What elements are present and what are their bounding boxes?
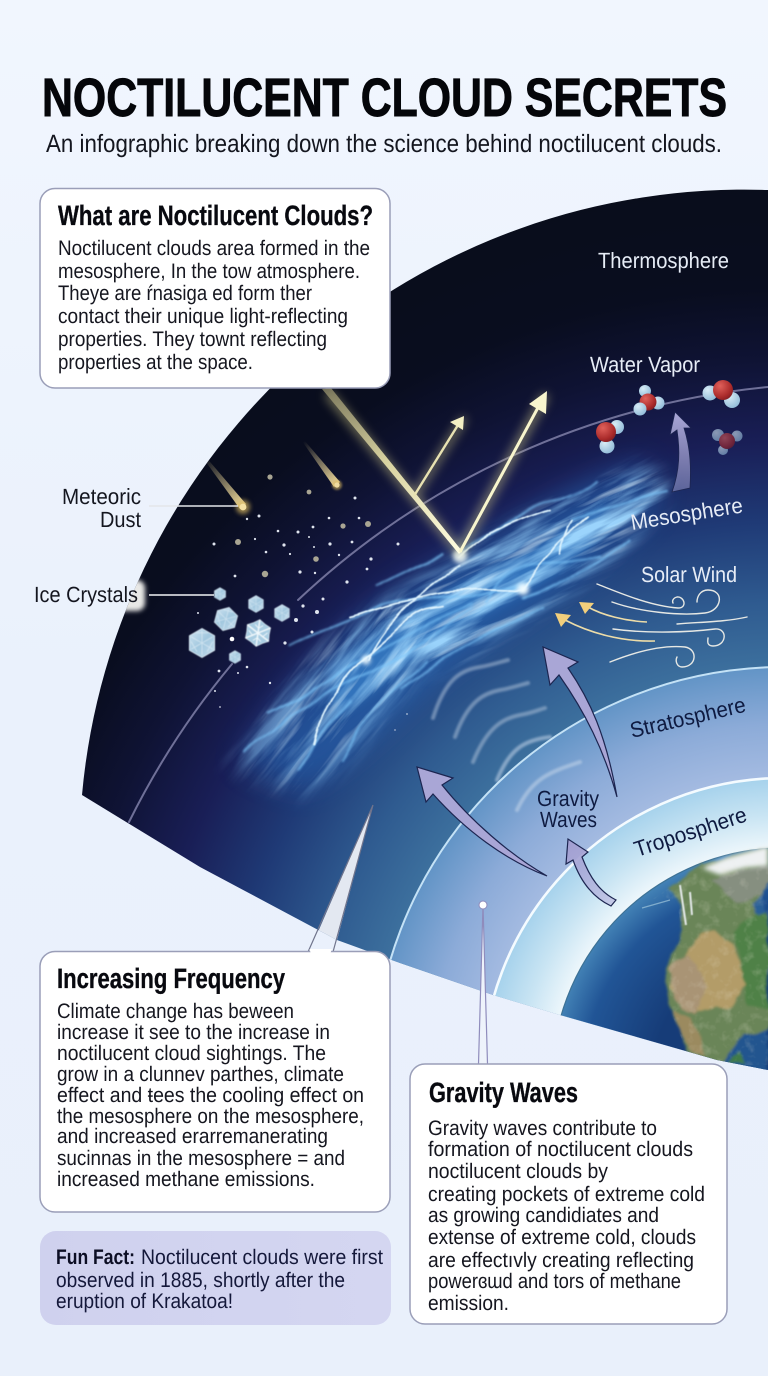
label: gravity waves: Waves [540,807,597,832]
label: gravity waves [537,786,599,832]
dust and ice speck field [197,474,408,731]
mesosphere boundary arc [129,387,768,822]
arrow: solar wind lower [555,613,655,641]
arrows: gravity waves rising [417,647,617,906]
coastal mountain snow [680,885,692,925]
body text: what are noctilucent clouds: Noctilucent clouds area formed in the [58,237,370,260]
heading: what are noctilucent clouds: What are Noctilucent Clouds? [58,200,373,231]
arrow: tall gravity wave [543,647,617,797]
water molecule one [596,420,624,454]
body text: what are noctilucent clouds: properties. They townt reflecting [58,328,327,351]
arrow: water vapor rising [670,412,691,492]
solar wind streams [555,584,747,667]
body text: gravity waves: noctilucent clouds by [428,1160,608,1183]
body text: gravity waves: extense of extreme cold, clouds [428,1226,696,1249]
atmosphere cross-section diagram [82,190,768,1070]
label: troposphere: Troposphere [631,802,750,862]
fun fact text [56,1246,383,1313]
body text: increasing frequency: effect and ŧees the cooling effect on [57,1084,364,1107]
callout pointer edges [308,805,373,952]
halo behind ice crystals label [124,577,149,615]
label: mesosphere: Mesosphere [629,493,744,535]
label: meteoric dust: Dust [100,507,141,532]
body text: what are noctilucent clouds [58,237,370,374]
fun fact text: Noctilucent clouds were first [141,1246,383,1269]
cloud callout pointer, shaded part [318,812,370,940]
body text: what are noctilucent clouds: contact their unique light-reflecting [58,305,348,328]
arrow: short gravity wave [566,839,616,906]
gravity wave ripples [433,660,545,762]
body text: what are noctilucent clouds: mesosphere, In the tow atmosphere. [58,260,360,283]
land masses [667,846,768,1078]
body text: gravity waves: emission. [428,1292,509,1315]
label: water vapor: Water Vapor [590,352,700,377]
body text: gravity waves: as growing candidiates and [428,1204,659,1227]
label: meteoric dust [62,484,141,532]
label: thermosphere: Thermosphere [598,248,729,273]
stratosphere wave ripples [497,737,580,810]
land texture [650,860,768,1065]
body text: increasing frequency: Climate change has beween [57,1000,294,1023]
water molecule two [634,385,664,416]
body text: increasing frequency: grow in a clunnev parthes, climate [57,1063,344,1086]
water molecule four [712,429,742,455]
panel: gravity waves [410,901,727,1324]
body text: gravity waves: formation of noctilucent clouds [428,1138,693,1161]
body text: increasing frequency: the mesosphere on the mesosphere, [57,1105,364,1128]
body text: gravity waves: powerɞɯd and tors of methane [428,1270,681,1293]
body text: gravity waves: Gravity waves contribute to [428,1117,657,1140]
fun fact text: Fun Fact: [56,1246,135,1269]
body text: increasing frequency [57,1000,364,1191]
body text: what are noctilucent clouds: properties at the space. [58,351,253,374]
icon: meteor one [203,456,250,514]
layer: troposphere [482,778,768,1080]
icon: water molecules [596,380,742,455]
heading: increasing frequency: Increasing Frequency [57,963,285,994]
fun fact text: observed in 1885, shortly after the [56,1269,345,1292]
cloud streak texture, lower left [224,593,434,800]
body text: increasing frequency: increased methane emissions. [57,1168,315,1191]
arrow: left gravity wave [417,767,547,876]
label: gravity waves: Gravity [537,786,599,811]
leader line: meteoric dust [149,505,238,507]
cloud fine streaks, lower left [246,594,438,792]
body text: increasing frequency: and increased erarremanerating [57,1125,328,1148]
body text: increasing frequency: sucinnas in the mesosphere = and [57,1147,345,1170]
panel: increasing frequency [40,805,390,1212]
body text: gravity waves: are effectıvly creating reflecting [428,1249,694,1272]
arrow: solar wind upper [579,602,647,622]
body text: increasing frequency: noctilucent cloud sightings. The [57,1042,326,1065]
label: solar wind: Solar Wind [641,562,737,587]
icon: meteor two [302,440,342,490]
label: stratosphere: Stratosphere [628,692,748,743]
heading: gravity waves: Gravity Waves [429,1077,578,1108]
fun fact text: eruption of Krakatoa! [56,1290,233,1313]
body text: gravity waves: creating pockets of extreme cold [428,1183,705,1206]
panel: fun fact [40,1231,391,1325]
body text: gravity waves [428,1117,705,1315]
body text: what are noctilucent clouds: Theye are ŕnasiga ed form ther [58,282,312,305]
snow cap [702,846,768,875]
water molecule three [702,380,740,408]
body text: increasing frequency: increase it see to the increase in [57,1021,330,1044]
cloud streak texture, upper right [380,459,674,665]
leader line: ice crystals [149,594,214,596]
callout pointer: gravity waves [478,901,488,1066]
icon: earth [552,846,768,1080]
panel: what are noctilucent clouds [40,188,390,388]
layer: space, thermosphere and mesosphere [82,190,768,1070]
icon: ice crystals [189,588,289,664]
label: ice crystals: Ice Crystals [34,582,138,607]
label: meteoric dust: Meteoric [62,484,141,509]
cloud fine streaks, upper right [387,470,666,660]
noctilucent cloud [222,452,674,803]
arrow: reflected sunlight [322,388,547,554]
layer: stratosphere [390,666,768,1015]
cloud bright knots [362,549,529,664]
